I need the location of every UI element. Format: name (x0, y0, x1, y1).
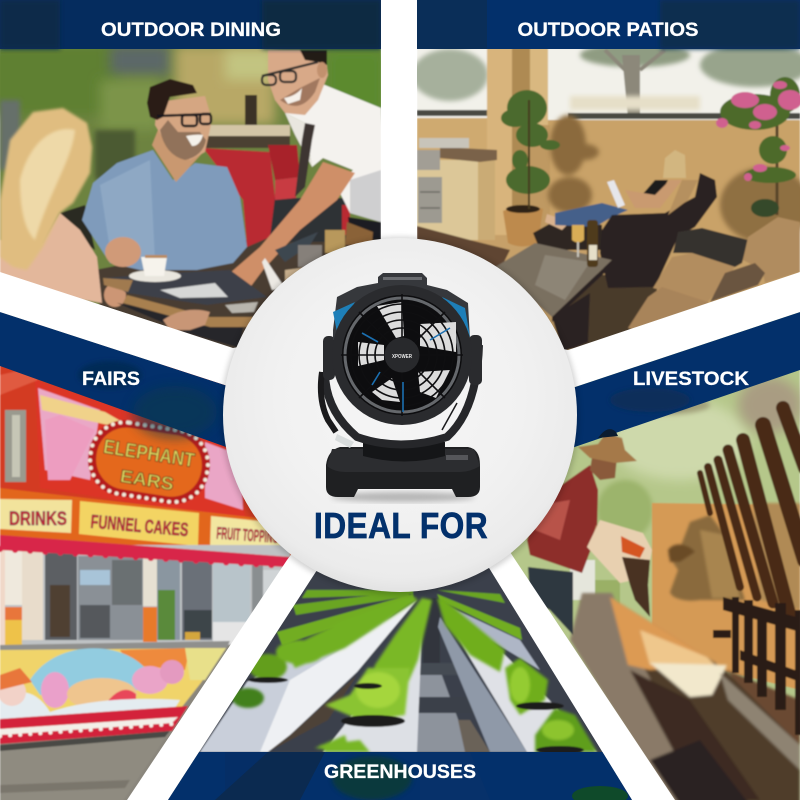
awning (0, 535, 290, 567)
label: fairs: FAIRS (82, 368, 140, 390)
label: livestock: LIVESTOCK (633, 368, 749, 390)
menu signs: FRUIT TOPPINGS (216, 524, 285, 547)
left trough (200, 598, 417, 752)
booth windows (0, 544, 291, 646)
menu signs: FUNNEL CAKES (90, 512, 189, 541)
panel: livestock photo (480, 312, 800, 800)
woman reading (533, 150, 686, 250)
panel: center disc (221, 237, 579, 595)
label band: livestock (560, 312, 800, 452)
fan yoke and cord (321, 335, 482, 448)
table (103, 230, 345, 348)
panel: greenhouses photo (160, 550, 640, 800)
walkway and frames (417, 598, 490, 752)
elephant ears sign: EARS (119, 466, 175, 494)
feed trough (570, 593, 800, 800)
pink flowering plant (716, 77, 800, 217)
fan base (326, 442, 480, 497)
menu signs: DRINKS (9, 509, 67, 530)
lettuce rows and plants (232, 596, 597, 752)
panel: fairs photo (0, 312, 320, 800)
column (487, 45, 550, 235)
fan brand mark: XPOWER (392, 354, 412, 360)
elephant ears sign: ELEPHANT (102, 436, 196, 472)
label: outdoor patios: OUTDOOR PATIOS (518, 19, 698, 41)
label band: fairs (0, 312, 240, 452)
feed wall board (652, 503, 800, 690)
orange fascia (0, 488, 300, 562)
planter pots (248, 677, 584, 754)
panel: outdoor dining photo (0, 0, 385, 360)
label band: greenhouses (160, 752, 640, 800)
sofa (628, 217, 800, 332)
tree shadow on wall (548, 115, 599, 213)
label: greenhouses: GREENHOUSES (324, 761, 476, 783)
menu signs (0, 498, 280, 546)
woman with blonde hair (0, 108, 126, 307)
painted mural lower (0, 648, 226, 722)
red chairs (203, 145, 350, 247)
far lettuce rows (277, 590, 522, 645)
floor (417, 226, 510, 267)
cow (668, 503, 800, 610)
pavement (0, 730, 170, 792)
red skirt (0, 706, 188, 744)
center trough (323, 603, 423, 752)
farmer (527, 433, 652, 635)
potted plant (501, 90, 560, 246)
granite table with wine (495, 220, 612, 352)
head gate bars (700, 408, 800, 617)
back wall (547, 121, 800, 236)
panel: outdoor patios photo (412, 0, 800, 360)
right trough (438, 607, 597, 752)
fan grille (332, 285, 472, 425)
counter (0, 641, 230, 652)
wicker armchair (600, 173, 717, 288)
label band: outdoor patios (417, 0, 800, 49)
icon: fan product (321, 273, 482, 502)
fan housing (333, 273, 470, 340)
elephant ears sign (87, 419, 211, 506)
mural upper (0, 368, 245, 520)
sky and trees (412, 43, 800, 120)
heading: ideal for: IDEAL FOR (314, 506, 488, 546)
gate legs (713, 597, 800, 735)
man in blue shirt (82, 79, 247, 270)
waiter (223, 50, 381, 297)
label band: outdoor dining (0, 0, 381, 49)
outdoor kitchen (417, 138, 497, 240)
label: outdoor dining: OUTDOOR DINING (101, 19, 281, 41)
